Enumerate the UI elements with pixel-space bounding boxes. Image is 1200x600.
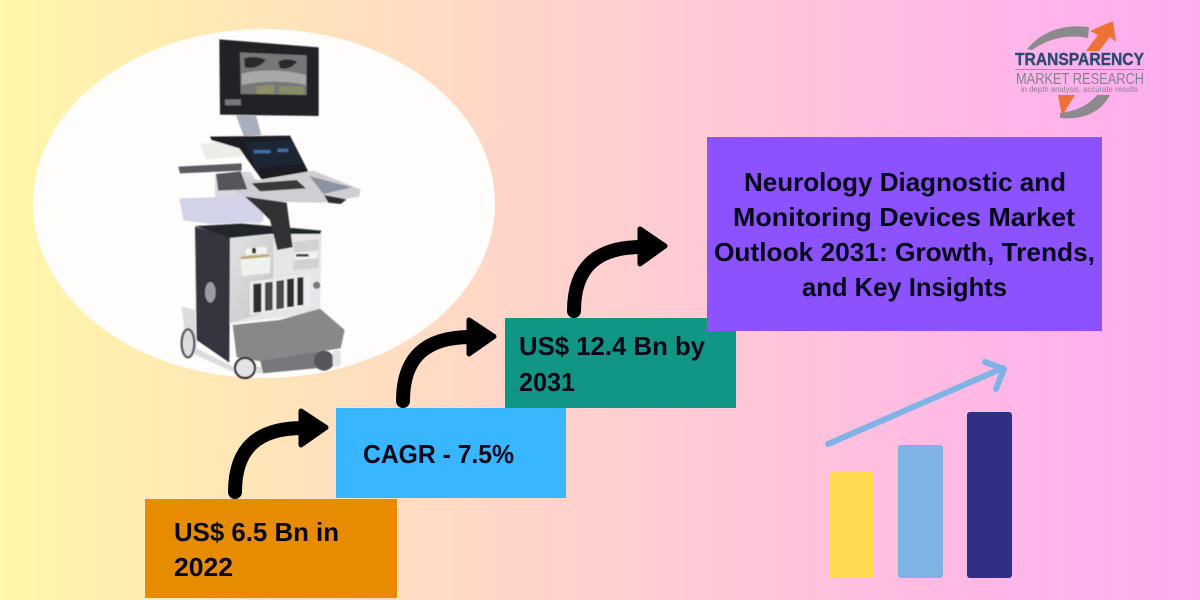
casters <box>182 329 341 378</box>
step 3 year: 2031 <box>519 367 575 397</box>
title line 2: Monitoring Devices Market <box>733 202 1075 232</box>
paper tray <box>200 139 244 159</box>
white oval behind device <box>33 29 495 378</box>
arrow: step 1 to step 2 <box>235 411 326 492</box>
logo rule <box>1015 69 1144 70</box>
step 2: blue box <box>336 408 566 498</box>
step 2 value: CAGR - 7.5% <box>363 439 514 469</box>
translucent basket <box>179 196 263 224</box>
touch panel <box>210 136 308 179</box>
arrow: step 3 to title <box>574 229 665 311</box>
light blue bar <box>898 445 943 578</box>
logo tagline: in depth analysis, accurate results <box>1021 85 1138 94</box>
base frame <box>182 307 265 374</box>
left shelf <box>178 163 242 173</box>
yellow bar <box>829 472 874 578</box>
probe ports <box>250 274 320 315</box>
step 1: orange box <box>145 499 397 598</box>
gray bumper <box>233 309 345 361</box>
logo upper arc <box>1027 26 1089 50</box>
monitor arm <box>236 115 261 137</box>
step 1 year: 2022 <box>174 552 233 582</box>
trend arrow <box>828 362 1004 444</box>
step 3: teal box <box>505 318 736 408</box>
cabinet body <box>195 223 322 363</box>
title panel <box>707 137 1102 331</box>
logo: Transparency Market Research <box>1015 21 1144 118</box>
bar chart icon <box>828 362 1012 578</box>
logo orange arrow <box>1086 21 1116 51</box>
monitor <box>219 39 319 116</box>
logo wordmark: TRANSPARENCY <box>1015 49 1144 69</box>
logo lower orange arrow <box>1058 95 1075 116</box>
arrow: step 2 to step 3 <box>403 320 494 401</box>
lower cabinet shadow <box>260 350 333 373</box>
console support mass <box>215 172 270 223</box>
step 1 value: US$ 6.5 Bn in <box>174 517 339 547</box>
title line 3: Outlook 2031: Growth, Trends, <box>714 237 1095 267</box>
logo lower arc <box>1060 95 1110 118</box>
title line 1: Neurology Diagnostic and <box>744 167 1066 197</box>
support strap <box>245 197 293 250</box>
keyboard console <box>216 171 361 204</box>
logo subtitle: MARKET RESEARCH <box>1016 71 1144 88</box>
step 3 value: US$ 12.4 Bn by <box>519 331 706 361</box>
device illustration: ultrasound machine <box>178 39 361 378</box>
navy bar <box>967 412 1012 578</box>
title line 4: and Key Insights <box>802 272 1007 302</box>
